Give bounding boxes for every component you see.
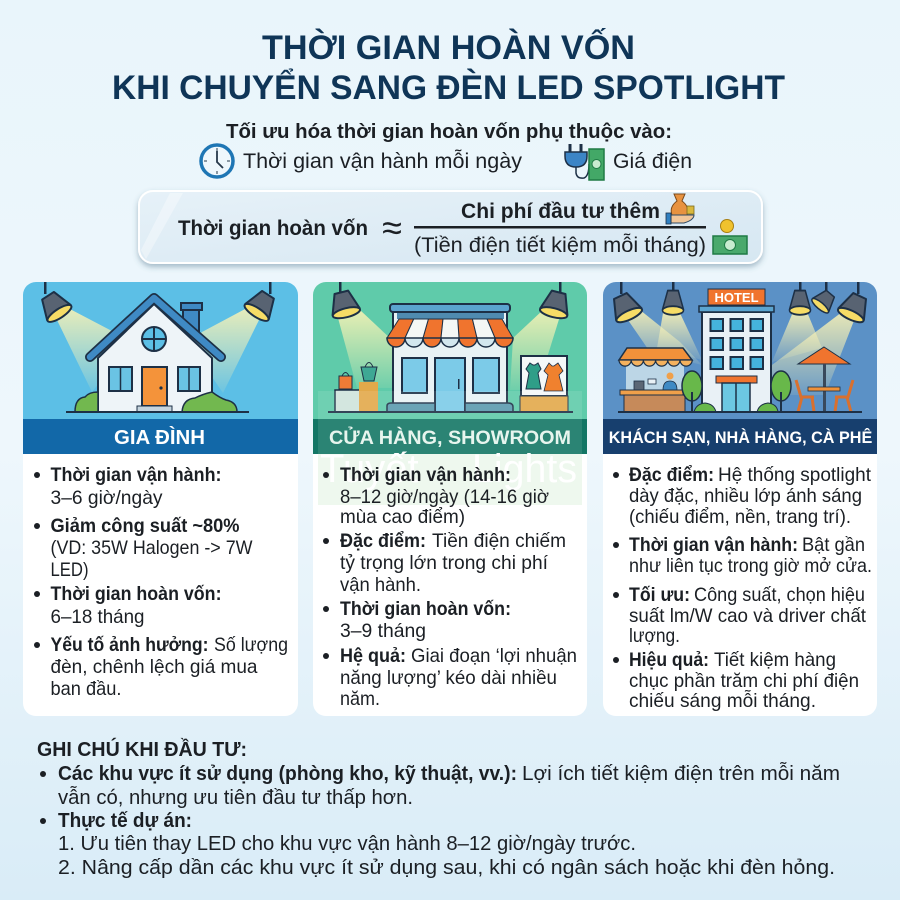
note: rarely used areas: vẫn có, nhưng ưu tiên đầu tư thấp hơn.: [58, 786, 413, 809]
numerator: Chi phí đầu tư thêm: [461, 200, 660, 223]
bullet list: Tiết kiệm hàng: [714, 650, 836, 671]
bullet list: 3–9 tháng: [340, 621, 426, 642]
bullet list: chiếu sáng mỗi tháng.: [629, 690, 816, 712]
watermark: Tuyết: [320, 447, 419, 491]
bullet list: dày đặc, nhiều lớp ánh sáng: [629, 486, 862, 507]
title: KHI CHUYỂN SANG ĐÈN LED SPOTLIGHT: [112, 69, 785, 107]
factor: electricity price: Giá điện: [613, 148, 692, 173]
bullet list: Yếu tố ảnh hưởng:: [50, 635, 208, 656]
bullet list: Thời gian vận hành:: [50, 465, 222, 486]
note: rarely used areas: Lợi ích tiết kiệm điện trên mỗi năm: [522, 762, 840, 785]
bullet list: Đặc điểm:: [340, 531, 426, 552]
bullet list: 3–6 giờ/ngày: [50, 488, 163, 509]
bullet list: (VD: 35W Halogen -> 7W: [50, 538, 253, 559]
bullet list: Bật gần: [802, 535, 865, 556]
approximately sign: ≈: [382, 207, 402, 248]
bullet list: suất lm/W cao và driver chất: [629, 606, 867, 627]
panel: payback formula: [139, 191, 762, 263]
bullet list: vận hành.: [340, 575, 421, 596]
bullet list: [34, 465, 288, 700]
bullet list: Hiệu quả:: [629, 650, 709, 671]
notes heading: GHI CHÚ KHI ĐẦU TƯ:: [37, 737, 247, 761]
panel: shop and showroom: [313, 282, 587, 716]
panel: household: [23, 282, 298, 716]
bullet list: Đặc điểm:: [629, 465, 714, 486]
bullet list: mùa cao điểm): [340, 507, 465, 528]
icon: coin and cash: [713, 220, 747, 254]
bullet list: [323, 465, 577, 710]
bullet list: đèn, chênh lệch giá mua: [50, 657, 258, 678]
bullet list: Hệ thống spotlight: [718, 465, 872, 486]
bullet list: (chiếu điểm, nền, trang trí).: [629, 507, 851, 528]
bullet list: [613, 465, 872, 712]
factor: operating time: Thời gian vận hành mỗi ngày: [243, 148, 522, 173]
bullet list: Số lượng: [214, 635, 288, 656]
bullet list: Giảm công suất ~80%: [50, 516, 240, 537]
bullet list: Tiền điện chiếm: [432, 531, 566, 552]
bullet list: ban đầu.: [50, 679, 122, 700]
note: project reality: Thực tế dự án:: [58, 810, 192, 832]
bullet list: lượng.: [629, 626, 680, 647]
bullet list: năng lượng’ kéo dài nhiều: [340, 668, 557, 689]
illustration: hotel, cafe and terrace with spotlights: HOTEL: [714, 290, 759, 305]
illustration: hotel, cafe and terrace with spotlights: [603, 282, 877, 454]
bullet list: như liên tục trong giờ mở cửa.: [629, 556, 872, 577]
icon: plug and money: [565, 144, 604, 180]
bullet list: Công suất, chọn hiệu: [694, 585, 865, 606]
note: rarely used areas: Các khu vực ít sử dụng (phòng kho, kỹ thuật, vv.):: [58, 763, 517, 785]
note: project reality: [40, 810, 835, 879]
bullet list: 8–12 giờ/ngày (14-16 giờ: [340, 487, 549, 508]
icon: money bag in hand: [666, 194, 694, 224]
illustration: house with spotlights: [23, 282, 298, 454]
note: project reality: 2. Nâng cấp dần các khu vực ít sử dụng sau, khi có ngân sách hoặc khi đèn hỏng.: [58, 857, 835, 879]
fraction line: [414, 226, 706, 228]
bullet list: Tối ưu:: [629, 585, 690, 606]
bullet list: LED): [50, 560, 88, 581]
note: rarely used areas: [40, 762, 840, 809]
bullet list: 6–18 tháng: [50, 607, 144, 628]
band label: KHÁCH SẠN, NHÀ HÀNG, CÀ PHÊ: [609, 428, 872, 447]
band label: CỬA HÀNG, SHOWROOM: [329, 425, 571, 449]
bullet list: Giai đoạn ‘lợi nhuận: [411, 646, 577, 667]
note: project reality: 1. Ưu tiên thay LED cho khu vực vận hành 8–12 giờ/ngày trước.: [58, 833, 636, 855]
bullet list: Thời gian hoàn vốn:: [340, 599, 511, 620]
title: [112, 28, 785, 107]
bullet list: Hệ quả:: [340, 646, 406, 667]
notes: investment notes: [37, 737, 840, 879]
watermark: [318, 391, 582, 505]
title: THỜI GIAN HOÀN VỐN: [262, 28, 635, 67]
bullet list: tỷ trọng lớn trong chi phí: [340, 553, 549, 574]
icon: clock: [201, 145, 233, 177]
bullet list: Thời gian vận hành:: [629, 535, 798, 556]
bullet list: chục phần trăm chi phí điện: [629, 671, 859, 692]
subtitle: Tối ưu hóa thời gian hoàn vốn phụ thuộc vào:: [226, 120, 672, 143]
bullet list: Thời gian hoàn vốn:: [50, 584, 222, 605]
band label: GIA ĐÌNH: [114, 426, 205, 449]
watermark: Lights: [472, 447, 577, 491]
bullet list: Thời gian vận hành:: [340, 465, 511, 486]
illustration: storefront with spotlights: [313, 282, 587, 454]
formula left side: Thời gian hoàn vốn: [178, 217, 368, 240]
denominator: (Tiền điện tiết kiệm mỗi tháng): [414, 232, 706, 257]
panel: hotels, restaurants, cafes: [603, 282, 877, 716]
bullet list: năm.: [340, 689, 380, 710]
